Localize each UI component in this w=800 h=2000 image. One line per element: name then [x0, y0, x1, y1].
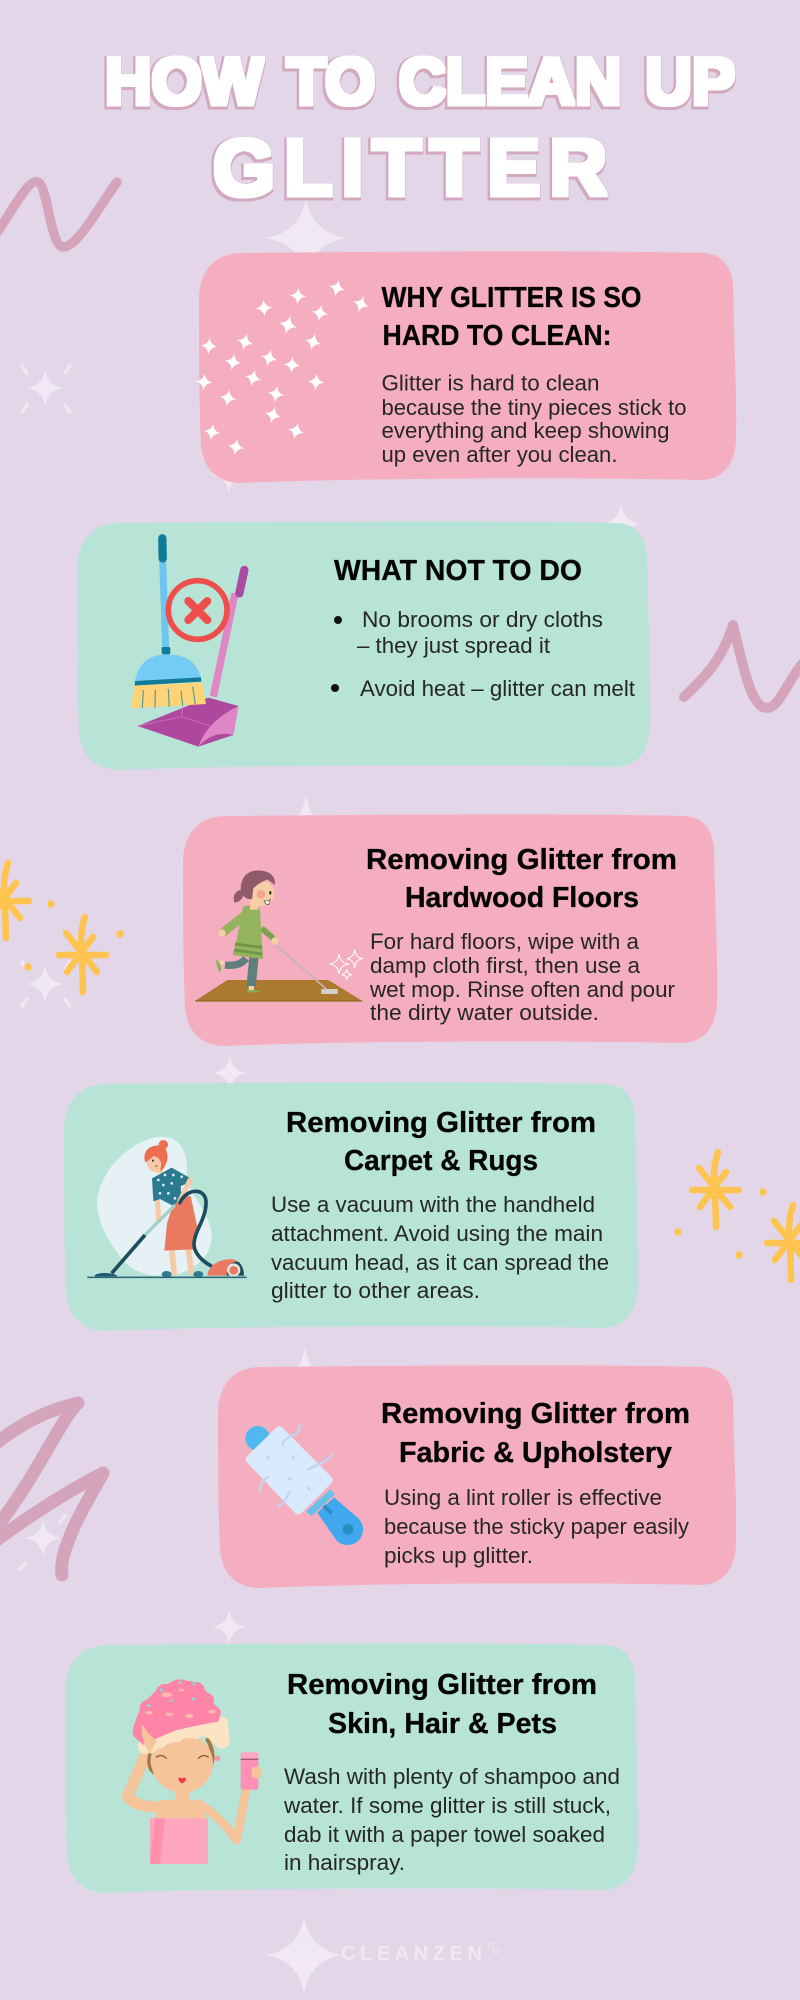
- heading: Hardwood Floors: [405, 882, 639, 914]
- body text: [382, 370, 686, 467]
- heading: [381, 1398, 690, 1469]
- body text: the dirty water outside.: [370, 1000, 599, 1025]
- body text: because the sticky paper easily: [384, 1514, 690, 1539]
- icon: lint roller: [245, 1425, 363, 1545]
- body text: picks up glitter.: [384, 1543, 533, 1568]
- body text: Use a vacuum with the handheld: [271, 1192, 595, 1217]
- panel: hardwood floors: [183, 814, 717, 1046]
- bullet list: – they just spread it: [357, 633, 551, 658]
- body text: damp cloth first, then use a: [370, 953, 640, 978]
- body text: everything and keep showing: [382, 418, 670, 443]
- bullet list: Avoid heat – glitter can melt: [360, 676, 636, 701]
- body text: vacuum head, as it can spread the: [271, 1250, 609, 1275]
- body text: in hairspray.: [284, 1850, 405, 1875]
- panel: skin, hair and pets: [65, 1643, 638, 1893]
- body text: wet mop. Rinse often and pour: [369, 977, 675, 1002]
- body text: For hard floors, wipe with a: [370, 929, 639, 954]
- body text: Wash with plenty of shampoo and: [284, 1764, 620, 1789]
- icon: broom and dustpan with cross: [131, 538, 244, 747]
- heading: [366, 844, 677, 914]
- background sparkles: [20, 197, 641, 1994]
- body text: glitter to other areas.: [271, 1278, 480, 1303]
- bullet list: No brooms or dry cloths: [362, 607, 603, 632]
- title: [105, 44, 735, 212]
- heading: [382, 282, 642, 352]
- body text: because the tiny pieces stick to: [382, 395, 686, 420]
- body text: attachment. Avoid using the main: [271, 1221, 603, 1246]
- heading: Removing Glitter from: [287, 1669, 597, 1701]
- title: HOW TO CLEAN UP: [105, 44, 735, 118]
- body text: water. If some glitter is still stuck,: [283, 1793, 611, 1818]
- heading: WHY GLITTER IS SO: [382, 282, 642, 314]
- heading: Fabric & Upholstery: [399, 1437, 672, 1469]
- heading: [286, 1107, 596, 1177]
- body text: [271, 1192, 609, 1303]
- panel: why glitter is hard to clean: [195, 251, 736, 483]
- scribble lower left: [0, 1403, 103, 1575]
- heading: [287, 1669, 597, 1740]
- body text: [369, 929, 675, 1025]
- panel: carpet and rugs: [64, 1082, 638, 1331]
- icon: girl mopping: [195, 870, 363, 1001]
- squiggle right: [684, 625, 800, 708]
- logo: cleanzen: CLEANZEN: [341, 1943, 482, 1965]
- yellow sparks right: [674, 1152, 800, 1280]
- heading: HARD TO CLEAN:: [382, 320, 612, 352]
- body text: Glitter is hard to clean: [382, 370, 600, 396]
- body text: Using a lint roller is effective: [384, 1485, 662, 1510]
- heading: WHAT NOT TO DO: [334, 555, 582, 587]
- icon: glitter stars: [195, 278, 372, 457]
- bullet list: [331, 607, 636, 701]
- heading: Removing Glitter from: [286, 1107, 596, 1139]
- body text: [384, 1485, 690, 1568]
- body text: [283, 1764, 620, 1875]
- heading: Removing Glitter from: [366, 844, 677, 876]
- heading: Skin, Hair & Pets: [328, 1708, 557, 1740]
- panel: fabric and upholstery: [218, 1365, 736, 1588]
- icon: woman vacuuming: [87, 1137, 247, 1278]
- yellow sparks left: [0, 863, 124, 992]
- title: GLITTER: [213, 123, 607, 212]
- body text: up even after you clean.: [382, 442, 618, 467]
- panel: what not to do: [77, 521, 650, 770]
- heading: Carpet & Rugs: [344, 1145, 538, 1177]
- squiggle top left: [0, 182, 117, 247]
- icon: woman shampooing hair: [127, 1679, 261, 1864]
- body text: dab it with a paper towel soaked: [284, 1822, 605, 1847]
- heading: Removing Glitter from: [381, 1398, 690, 1430]
